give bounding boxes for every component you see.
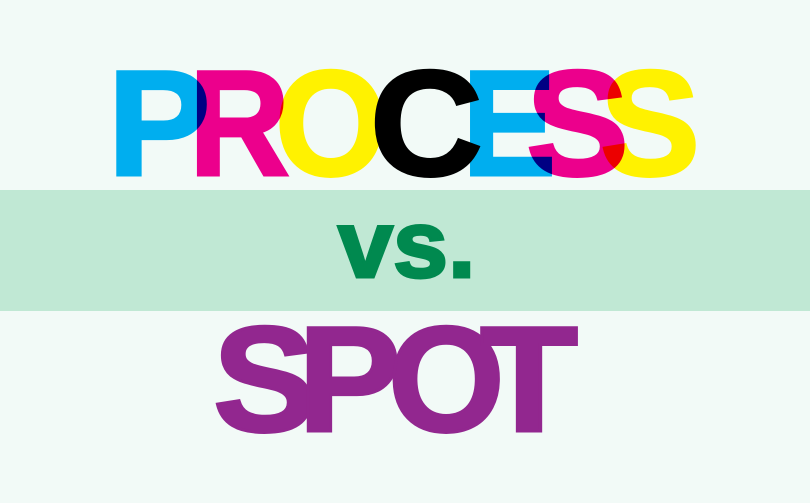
heading: SPOT: T <box>480 295 578 463</box>
heading: SPOT: S <box>213 296 316 464</box>
heading: vs.: vs. <box>338 190 475 298</box>
heading: PROCESS in CMYK letters: O <box>275 40 387 208</box>
heading: SPOT <box>213 295 578 464</box>
heading: PROCESS in CMYK letters: E <box>462 39 556 207</box>
heading: PROCESS in CMYK letters: R <box>189 39 290 207</box>
heading: SPOT: O <box>388 295 505 463</box>
heading: PROCESS in CMYK letters: S <box>600 39 700 207</box>
green band <box>0 190 810 311</box>
heading: PROCESS in CMYK letters: S <box>526 40 629 208</box>
heading: PROCESS in CMYK letters: C <box>370 40 483 207</box>
heading: PROCESS in CMYK letters <box>108 39 700 208</box>
heading: PROCESS in CMYK letters: P <box>108 40 211 208</box>
heading: SPOT: P <box>298 296 401 464</box>
